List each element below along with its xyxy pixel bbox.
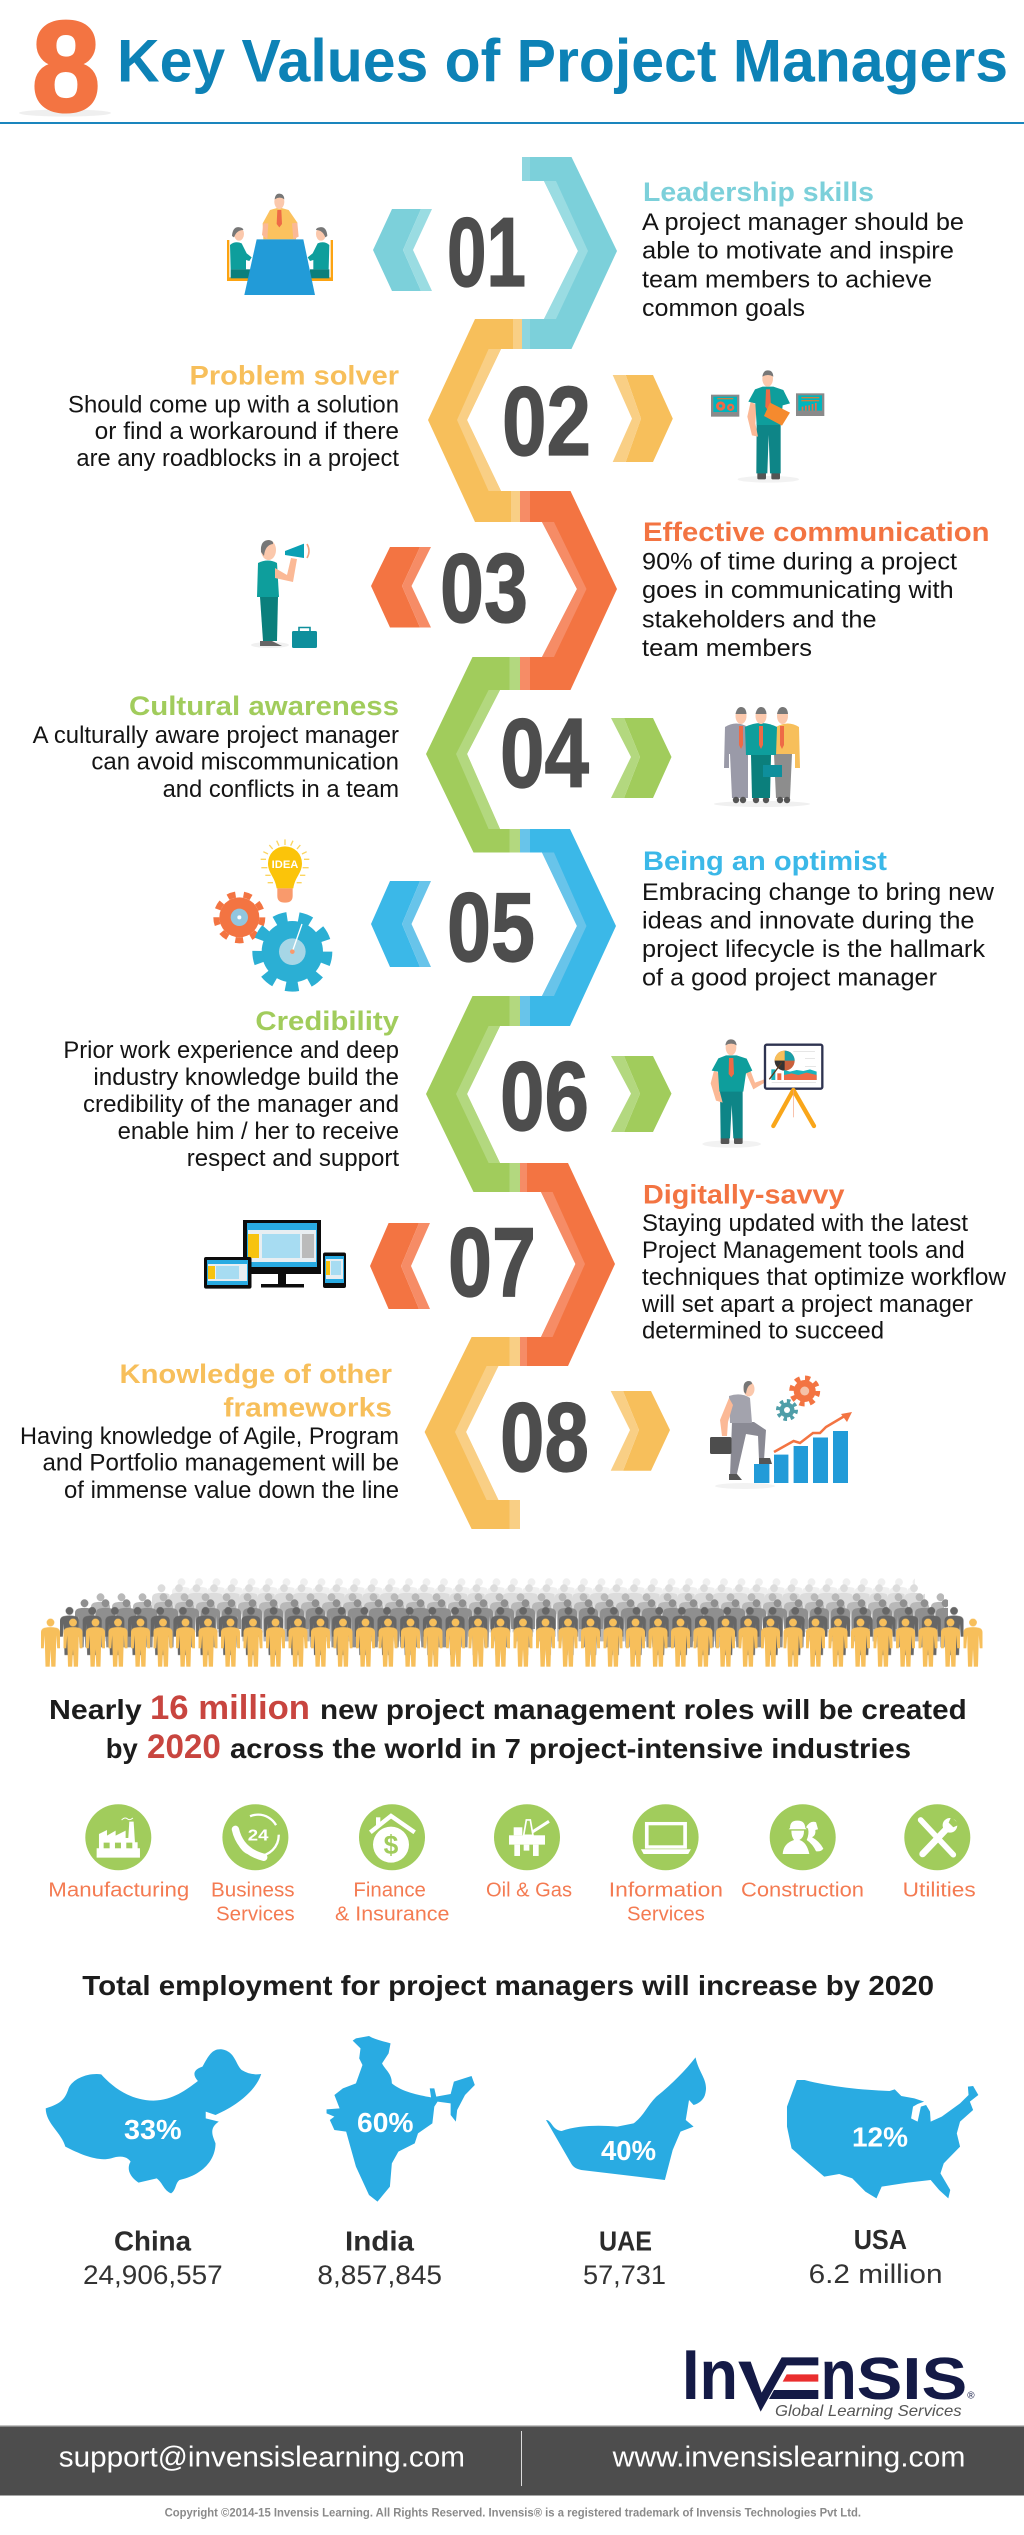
text block: Leadership skills: able to motivate and inspire xyxy=(642,238,954,264)
text block: Problem solver: are any roadblocks in a project xyxy=(76,445,399,472)
segment 04 xyxy=(426,657,530,852)
text block: Credibility: industry knowledge build the xyxy=(93,1064,399,1091)
text block: Knowledge of other frameworks xyxy=(20,1359,399,1504)
footer bar xyxy=(0,2425,1024,2496)
text block: Problem solver: Problem solver xyxy=(190,361,400,391)
stat: India: India xyxy=(345,2226,414,2257)
text block: Knowledge of other frameworks: and Portfolio management will be xyxy=(42,1450,399,1477)
stat: India: 60% xyxy=(357,2107,414,2138)
crowd of people xyxy=(41,1578,983,1667)
segment 07 xyxy=(520,1163,615,1366)
text block: Leadership skills: team members to achieve xyxy=(642,266,932,294)
industry: Manufacturing: Manufacturing xyxy=(48,1880,189,1902)
logo: Invensis: Global Learning Services xyxy=(775,2403,962,2420)
text block: Being an optimist: Being an optimist xyxy=(643,846,887,876)
heading: total employment: Total employment for project managers will increase by 2020 xyxy=(82,1970,934,2001)
map: USA xyxy=(787,2080,978,2198)
headline: 16 million roles xyxy=(49,1689,967,1766)
stat: UAE: 57,731 xyxy=(583,2260,666,2290)
stat: USA: USA xyxy=(854,2224,907,2255)
industry: Construction xyxy=(741,1804,864,1902)
text block: Digitally-savvy: Staying updated with the latest xyxy=(642,1210,968,1237)
text block: Leadership skills: Leadership skills xyxy=(643,177,874,207)
industry: Business Services: Business xyxy=(211,1880,295,1902)
icon: man with megaphone xyxy=(251,540,317,648)
number 06: 06 xyxy=(500,1041,589,1151)
logo: Invensis: n xyxy=(821,2335,857,2414)
logo: Invensis: SIS xyxy=(857,2345,967,2412)
number 01: 01 xyxy=(447,197,526,307)
headline: 16 million roles: by xyxy=(106,1733,138,1764)
industry: Business Services: 24 xyxy=(248,1827,269,1844)
chevron 08 xyxy=(611,1391,670,1471)
title: Key Values of Project Managers xyxy=(117,28,1008,94)
map: India xyxy=(327,2036,475,2202)
icon: meeting table xyxy=(227,194,333,295)
segment 01 xyxy=(522,157,617,349)
stat: USA: 12% xyxy=(852,2122,908,2153)
headline: 16 million roles: 2020 xyxy=(147,1728,221,1766)
chevron 03 xyxy=(371,547,431,628)
icon: idea bulb and gears: IDEA xyxy=(272,859,298,871)
hexagon chain xyxy=(425,157,617,1529)
footer bar: support@invensislearning.com xyxy=(59,2442,465,2474)
industry: Information Services: Information xyxy=(609,1880,723,1902)
text block: Being an optimist: ideas and innovate during the xyxy=(642,908,974,935)
icon: climbing growth chart xyxy=(710,1378,852,1489)
headline: 16 million roles: 16 million xyxy=(150,1689,310,1727)
text block: Effective communication: 90% of time during a project xyxy=(642,549,957,576)
stat: China xyxy=(46,2049,261,2290)
map: UAE xyxy=(546,2057,706,2180)
text block: Credibility: Prior work experience and deep xyxy=(63,1037,399,1064)
text block: Knowledge of other frameworks: of immense value down the line xyxy=(64,1477,399,1504)
headline: 16 million roles: across the world in 7 project-intensive industries xyxy=(230,1733,911,1764)
text block: Problem solver xyxy=(68,361,400,472)
stat: USA: 6.2 million xyxy=(809,2259,942,2289)
stat: UAE: UAE xyxy=(599,2226,652,2257)
industry: Information Services: Services xyxy=(627,1904,705,1926)
icon: presenter with board xyxy=(702,1039,822,1148)
industry: Construction: Construction xyxy=(741,1880,864,1902)
map: China xyxy=(46,2049,261,2193)
text block: Digitally-savvy: techniques that optimize workflow xyxy=(642,1264,1007,1291)
industry: Utilities xyxy=(903,1804,976,1902)
segment 06 xyxy=(426,996,530,1192)
icon: team of three xyxy=(714,707,810,807)
industry: Finance & Insurance xyxy=(335,1804,449,1926)
headline: 16 million roles: Nearly xyxy=(49,1694,142,1725)
industry: Information Services xyxy=(609,1804,723,1926)
text block: Cultural awareness: Cultural awareness xyxy=(129,691,399,721)
text block: Effective communication: Effective communication xyxy=(643,517,990,547)
text block: Cultural awareness: and conflicts in a team xyxy=(163,776,399,803)
icon: idea bulb and gears xyxy=(216,839,327,986)
stat: China: 33% xyxy=(124,2114,182,2145)
footer bar: www.invensislearning.com xyxy=(612,2442,965,2474)
text block: Knowledge of other frameworks: Having knowledge of Agile, Program xyxy=(20,1423,399,1450)
industry: Manufacturing xyxy=(48,1804,189,1902)
number 02: 02 xyxy=(502,366,591,476)
icon: man with screens xyxy=(711,370,824,483)
number 07: 07 xyxy=(448,1207,536,1317)
text block: Digitally-savvy: determined to succeed xyxy=(642,1318,884,1345)
stat: China: 24,906,557 xyxy=(83,2260,223,2290)
text block: Being an optimist: of a good project manager xyxy=(642,965,937,992)
headline: 16 million roles: new project management roles will be created xyxy=(320,1694,967,1725)
icon: responsive devices xyxy=(204,1220,346,1289)
title xyxy=(19,0,1008,139)
text block: Credibility xyxy=(63,1006,399,1172)
text block: Effective communication: goes in communicating with xyxy=(642,577,954,604)
chevron 05 xyxy=(371,881,431,967)
text block: Credibility: Credibility xyxy=(255,1006,399,1036)
number 05: 05 xyxy=(447,872,535,982)
text block: Leadership skills: A project manager should be xyxy=(642,209,964,236)
text block: Cultural awareness xyxy=(33,691,399,803)
text block: Digitally-savvy xyxy=(641,1180,1007,1345)
text block: Digitally-savvy: Project Management tools and xyxy=(642,1237,965,1264)
chevron 01 xyxy=(373,209,432,291)
stat: India xyxy=(317,2036,475,2290)
text block: Leadership skills: common goals xyxy=(642,295,805,322)
number 03: 03 xyxy=(440,533,528,643)
text block: Being an optimist: Embracing change to bring new xyxy=(642,879,995,906)
industry: Finance & Insurance: & Insurance xyxy=(335,1904,449,1926)
text block: Leadership skills xyxy=(642,177,964,322)
industry: Business Services: Services xyxy=(216,1904,295,1926)
text block: Effective communication: stakeholders and the xyxy=(642,606,876,634)
text block: Cultural awareness: can avoid miscommunication xyxy=(91,749,399,776)
logo: Invensis: ® xyxy=(967,2391,975,2402)
industry: Utilities: Utilities xyxy=(903,1880,976,1902)
text block: Knowledge of other frameworks: frameworks xyxy=(223,1392,392,1422)
logo: Invensis xyxy=(682,2335,975,2420)
text block: Effective communication xyxy=(642,517,990,662)
text block: Credibility: credibility of the manager and xyxy=(83,1091,399,1118)
title: 8 xyxy=(32,0,100,139)
copyright: Copyright ©2014-15 Invensis Learning. All Rights Reserved. Invensis® is a registered trademark of Invensis Technologies Pvt Ltd. xyxy=(165,2506,861,2520)
stat: UAE: 40% xyxy=(601,2135,656,2166)
logo: Invensis: In xyxy=(682,2335,738,2414)
text block: Problem solver: Should come up with a solution xyxy=(68,392,399,418)
chevron 02 xyxy=(613,375,673,462)
industry: Business Services xyxy=(211,1804,295,1926)
text block: Being an optimist xyxy=(642,846,995,992)
text block: Digitally-savvy: will set apart a project manager xyxy=(641,1291,973,1318)
chevron 07 xyxy=(370,1223,430,1309)
text block: Problem solver: or find a workaround if there xyxy=(95,418,399,445)
segment 02 xyxy=(428,319,530,522)
industry: Oil & Gas xyxy=(486,1804,572,1902)
number 08: 08 xyxy=(500,1382,589,1492)
text block: Effective communication: team members xyxy=(642,635,812,662)
chevron arrows xyxy=(370,209,673,1471)
industry: Finance & Insurance: Finance xyxy=(353,1880,426,1902)
text block: Being an optimist: project lifecycle is the hallmark xyxy=(642,936,986,963)
text block: Cultural awareness: A culturally aware project manager xyxy=(33,722,399,749)
stat: India: 8,857,845 xyxy=(317,2260,442,2290)
stat: UAE xyxy=(546,2057,706,2290)
text block: Credibility: enable him / her to receive xyxy=(118,1118,399,1145)
segment 05 xyxy=(520,829,616,1026)
industry: Oil & Gas: Oil & Gas xyxy=(486,1880,572,1902)
text block: Knowledge of other frameworks: Knowledge of other xyxy=(120,1359,393,1389)
chevron 06 xyxy=(611,1056,672,1132)
stat: USA xyxy=(787,2080,978,2289)
number 04: 04 xyxy=(500,698,589,808)
industry: Finance & Insurance: $ xyxy=(384,1830,399,1860)
segment 03 xyxy=(520,491,617,690)
stat: China: China xyxy=(114,2226,191,2257)
chevron 04 xyxy=(611,718,672,798)
segment 08 xyxy=(425,1337,527,1529)
text block: Digitally-savvy: Digitally-savvy xyxy=(643,1180,844,1210)
text block: Credibility: respect and support xyxy=(187,1145,399,1172)
